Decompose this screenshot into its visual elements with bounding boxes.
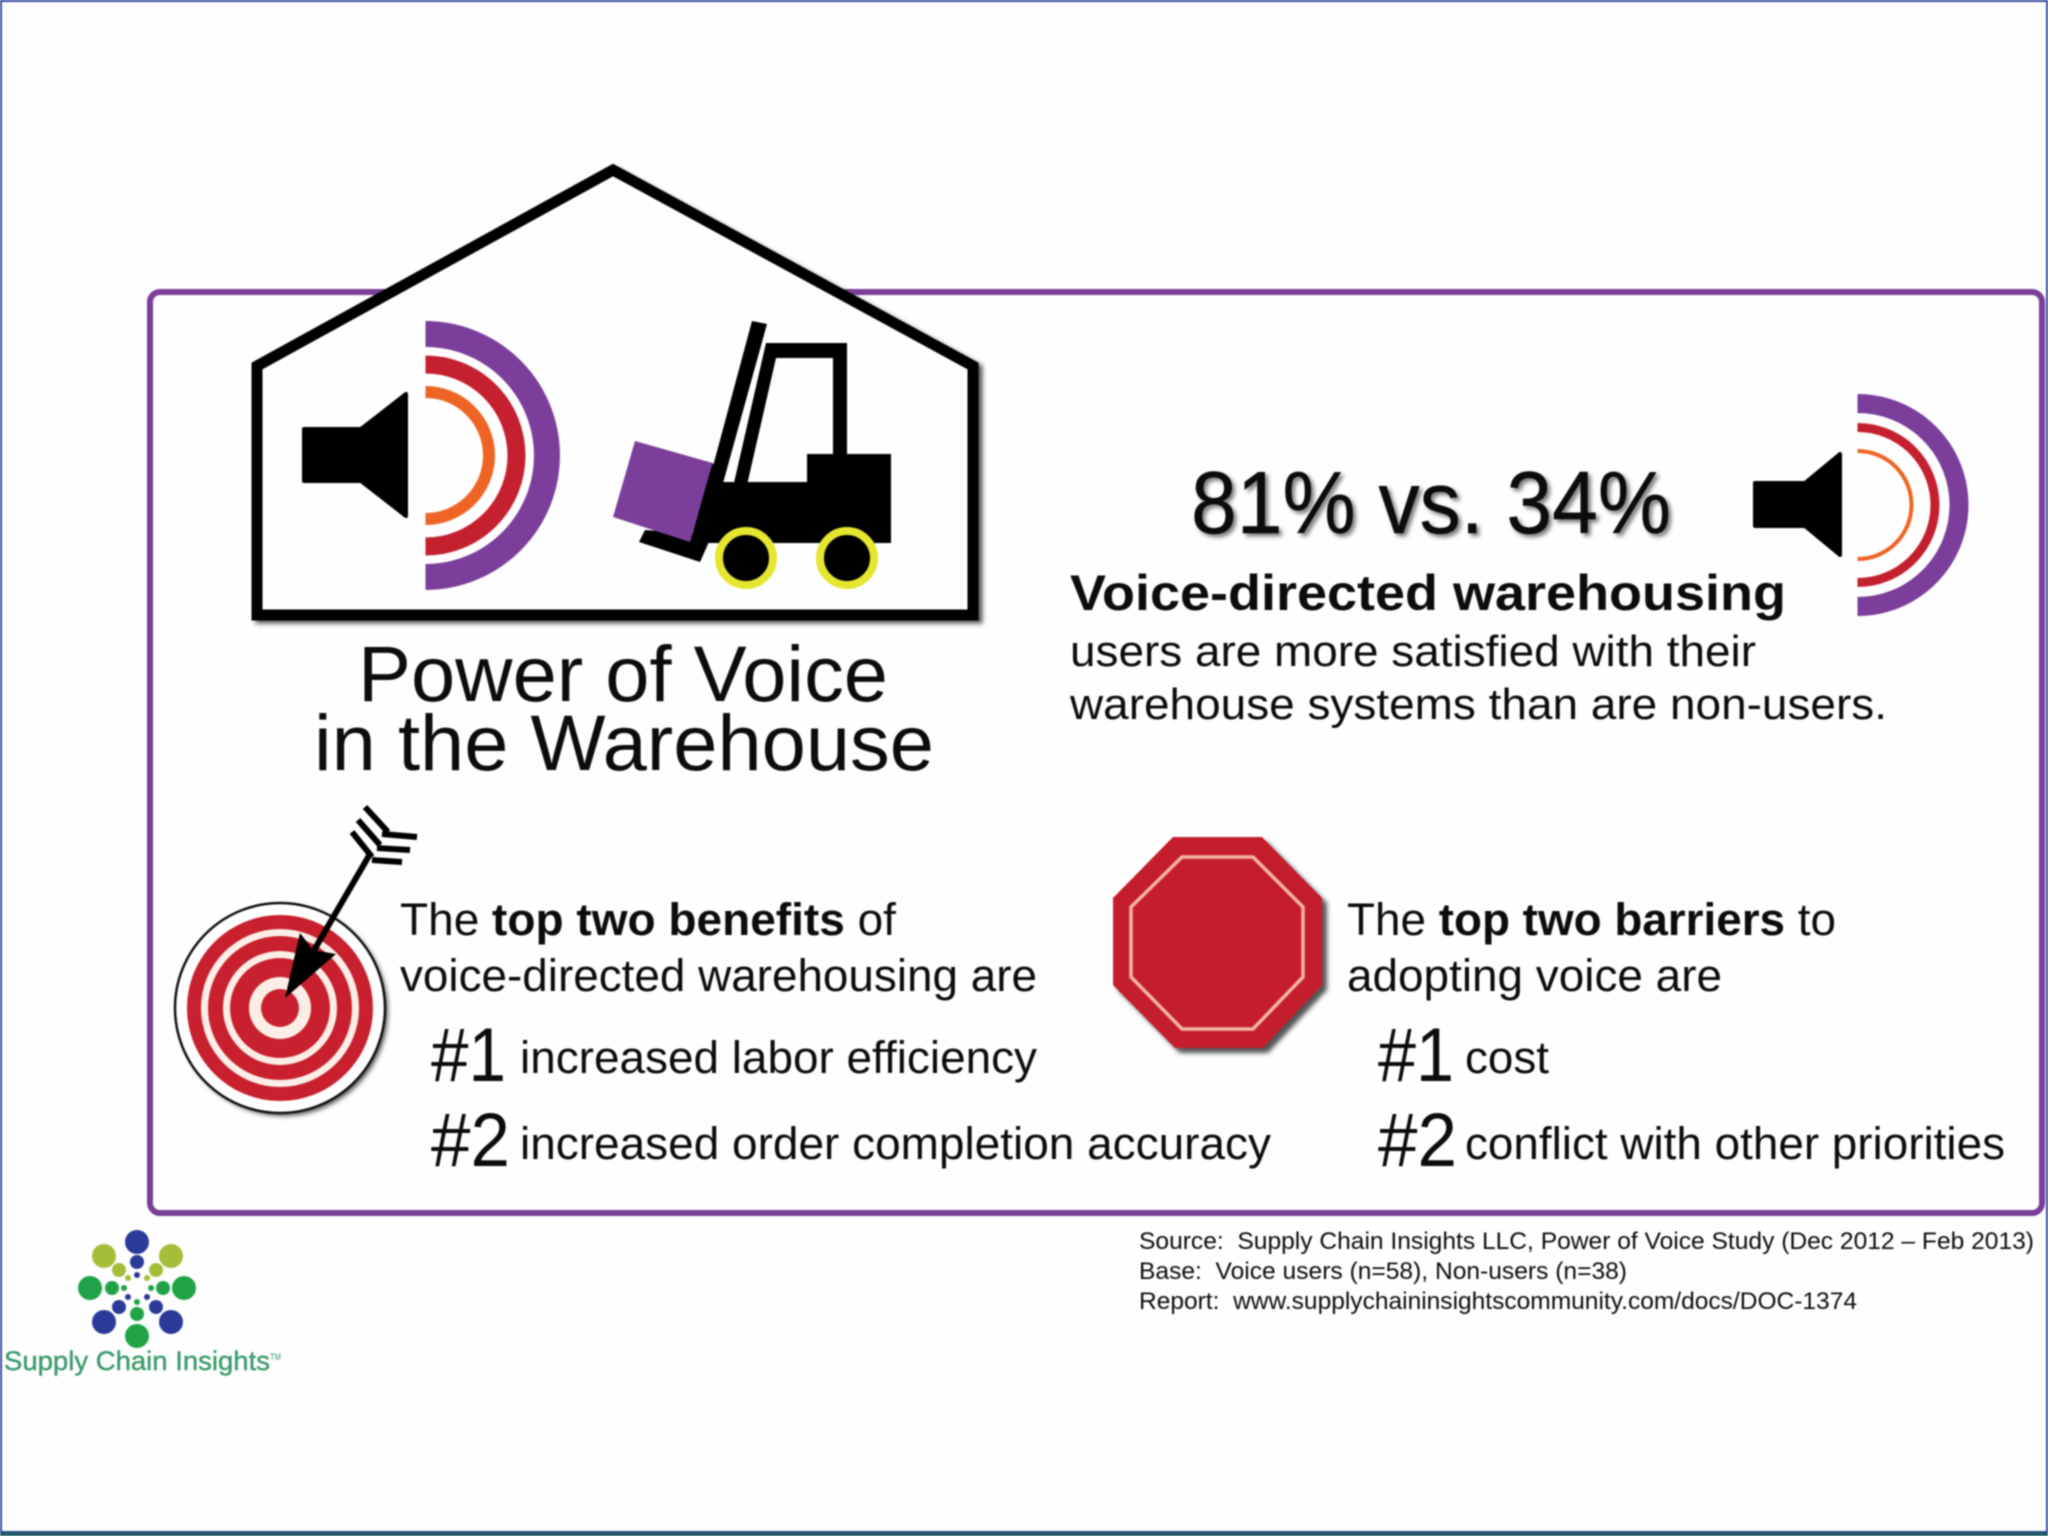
statistic: 81% vs. 34%: 81% vs. 34% <box>1191 453 1671 552</box>
text: barriers heading line 2: adopting voice are <box>1347 950 1722 1001</box>
benefit 1: #1 <box>431 1013 506 1098</box>
panel: satisfaction statistic <box>1069 404 1959 729</box>
barrier 1 <box>1378 1013 1550 1098</box>
barrier 2: conflict with other priorities <box>1465 1118 2005 1169</box>
benefit 2: #2 <box>431 1098 510 1183</box>
benefit 2 <box>431 1098 1272 1183</box>
text: voice-directed warehousing description: Voice-directed warehousing <box>1070 565 1786 621</box>
text: source notes: Base: Voice users (n=58), Non-users (n=38) <box>1139 1258 1627 1285</box>
panel: barriers <box>1113 837 2005 1183</box>
icon: target with arrow <box>175 807 417 1116</box>
title <box>314 629 934 787</box>
text: voice-directed warehousing description <box>1069 565 1887 729</box>
icon: logo dots <box>78 1230 196 1348</box>
icon: forklift <box>613 321 891 585</box>
benefit 1 <box>431 1013 1038 1098</box>
benefit 1: increased labor efficiency <box>520 1032 1038 1083</box>
panel: purple frame <box>150 292 2042 1213</box>
icon: warehouse outline <box>257 170 977 618</box>
icon: small speaker <box>1755 404 1959 606</box>
text: top two barriers heading: The top two barriers to <box>1347 894 1836 945</box>
text: voice-directed warehousing description: warehouse systems than are non-users. <box>1069 680 1887 729</box>
panel: benefits <box>175 807 1272 1183</box>
text: source notes <box>1139 1228 2034 1315</box>
logo: Supply Chain Insights <box>4 1230 281 1376</box>
text: source notes: Report: www.supplychaininsightscommunity.com/docs/DOC-1374 <box>1139 1288 1857 1315</box>
text: source notes: Source: Supply Chain Insights LLC, Power of Voice Study (Dec 2012 – Feb 2013) <box>1139 1228 2034 1255</box>
benefit 2: increased order completion accuracy <box>520 1118 1272 1169</box>
title: in the Warehouse <box>314 698 934 787</box>
text: benefits heading line 2: voice-directed warehousing are <box>400 950 1037 1001</box>
icon: stop sign <box>1113 837 1327 1053</box>
text: logo wordmark: Supply Chain Insights <box>4 1346 270 1376</box>
barrier 1: #1 <box>1378 1013 1454 1098</box>
text: top two benefits heading: The top two benefits of <box>400 894 896 945</box>
icon: large speaker <box>304 334 547 577</box>
panel: warehouse header <box>257 170 977 787</box>
text: voice-directed warehousing description: users are more satisfied with their <box>1070 627 1756 676</box>
title: Power of Voice <box>358 629 888 718</box>
text: logo wordmark: TM <box>270 1352 281 1362</box>
barrier 2: #2 <box>1378 1098 1457 1183</box>
barrier 1: cost <box>1465 1032 1550 1083</box>
barrier 2 <box>1378 1098 2005 1183</box>
